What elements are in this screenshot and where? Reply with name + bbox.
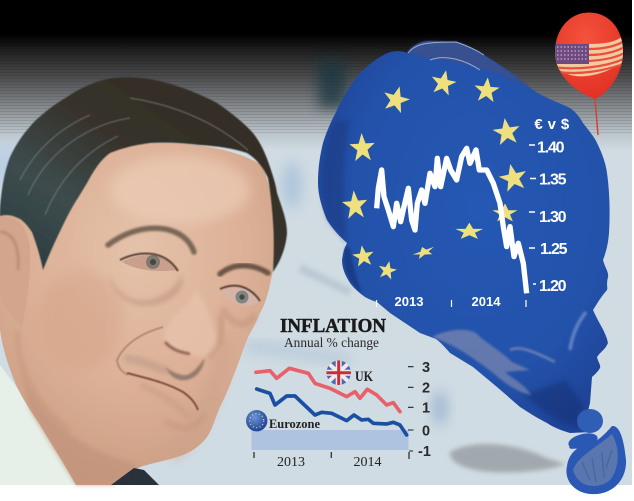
eye bags [110,275,183,306]
axis labels: 1.40 [537,140,565,156]
year labels [395,294,501,309]
below zero band [252,430,408,450]
balloon body [318,41,610,433]
y axis labels: 2 [422,380,430,396]
neck shading [20,370,140,485]
axis ticks [529,145,536,284]
deflated EU balloon [318,41,626,494]
y axis ticks [408,367,414,451]
balloon string [595,99,598,135]
cheek tone [38,270,122,370]
left fold shading [322,120,350,243]
ear [0,217,30,328]
balloon body [555,12,623,99]
x axis labels: 2014 [354,455,382,470]
shadow of balloon [450,444,566,473]
balloon neck roll [566,426,626,494]
forehead highlight [110,156,250,224]
x axis labels [277,455,382,470]
eyebrows [108,228,194,252]
y axis labels: 1 [422,400,430,416]
axis labels [537,140,568,295]
Eurozone line [257,389,407,435]
portrait of man [0,77,287,485]
Eurozone label: Eurozone [269,416,320,431]
euro vs dollar line chart [376,116,570,309]
y axis labels: 0 [422,424,430,440]
moustache shadow [165,358,205,380]
y axis labels: 3 [422,360,430,376]
year ticks [376,300,526,307]
neck and face [0,143,276,485]
year labels: 2014 [472,294,501,309]
mouth [127,373,198,410]
y axis labels: -1 [418,444,431,460]
axis labels: 1.30 [539,209,567,226]
hair strands [20,98,248,215]
shirt collar [0,365,76,485]
right eye [220,286,260,306]
cheek crease [117,327,163,375]
axis labels: 1.35 [539,172,567,188]
lower wrinkles [432,330,532,396]
top crest highlights [407,41,533,90]
Eurozone globe icon [246,410,267,431]
left eye [120,254,178,271]
x axis ticks [254,452,409,459]
nose [165,290,218,357]
red US balloon [555,12,623,135]
UK line [256,368,400,412]
tie [111,468,159,485]
inflation chart [246,316,431,470]
axis title: € v $ [534,116,570,133]
UK flag icon [326,360,351,385]
year labels: 2013 [395,294,423,309]
US flag [555,38,623,76]
axis labels: 1.20 [539,278,567,295]
y axis labels [418,360,431,460]
exchange rate line [377,148,527,293]
knot [577,409,603,433]
hair [0,77,287,272]
chart subtitle: Annual % change [284,336,379,351]
UK label: UK [355,369,374,385]
axis labels: 1.25 [540,241,568,258]
x axis labels: 2013 [277,455,305,470]
chart title: INFLATION [280,316,386,337]
EU stars on balloon [341,68,529,280]
